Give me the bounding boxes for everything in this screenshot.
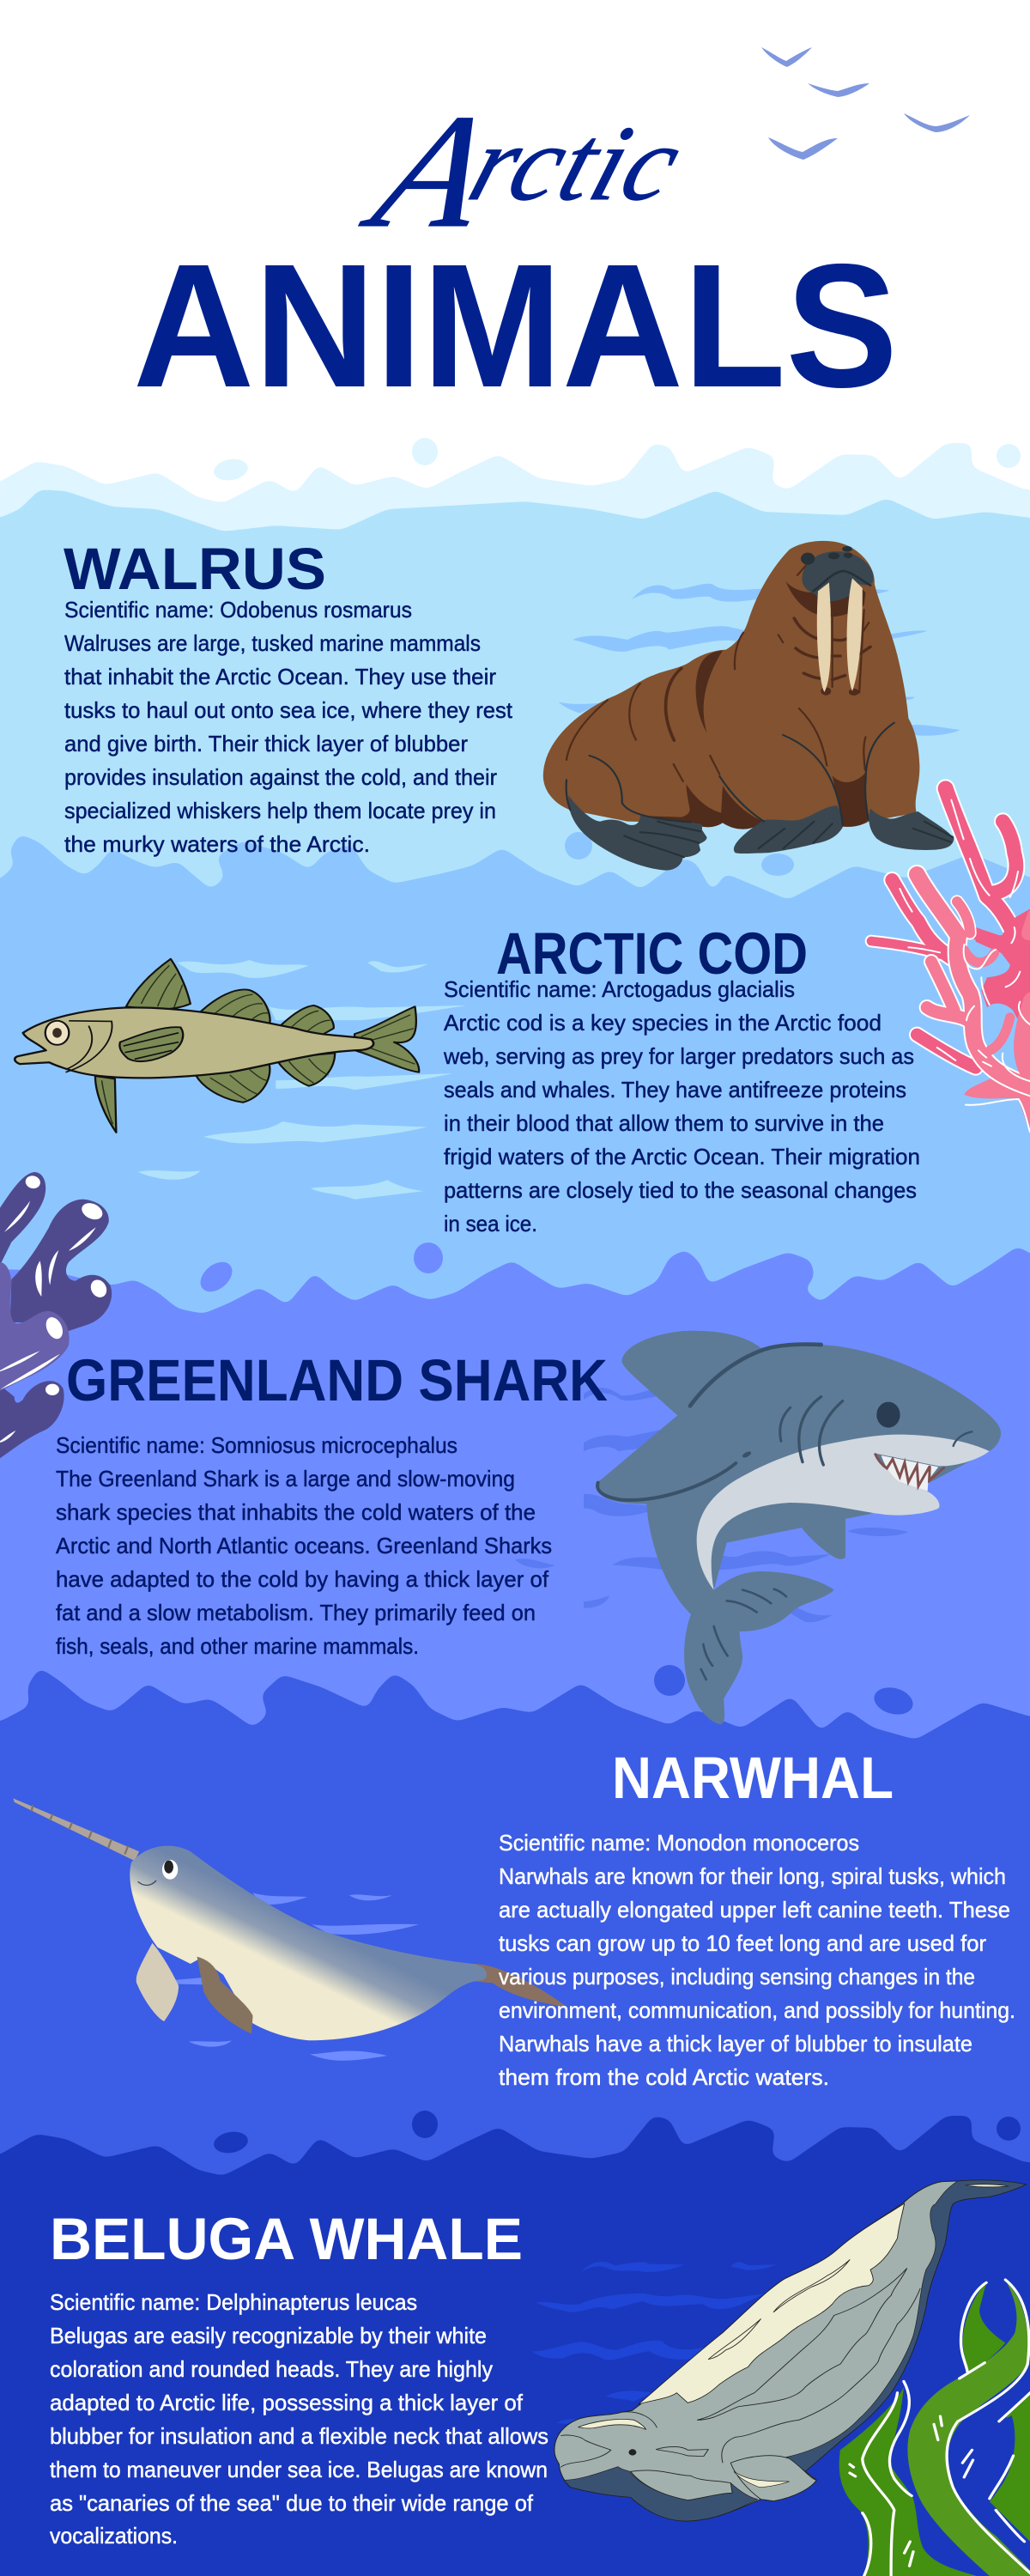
panel: beluga whale [50, 2180, 1030, 2576]
icon: seaweed [839, 2280, 1030, 2576]
text: walrus description: that inhabit the Arctic Ocean. They use their [64, 664, 496, 690]
text: walrus description: Scientific name: Odobenus rosmarus [64, 597, 412, 623]
text: greenland shark description: fat and a slow metabolism. They primarily feed on [56, 1600, 536, 1625]
text: greenland shark description: Scientific name: Somniosus microcephalus [56, 1432, 457, 1458]
illustration: walrus [543, 541, 960, 871]
text: beluga whale description: blubber for insulation and a flexible neck that allows [50, 2423, 548, 2449]
text: greenland shark description: have adapted to the cold by having a thick layer of [56, 1566, 549, 1592]
heading: arctic cod: ARCTIC COD [496, 920, 808, 987]
text: arctic cod description [443, 976, 920, 1236]
text: arctic cod description: seals and whales. They have antifreeze proteins [444, 1077, 906, 1103]
text: walrus description: specialized whiskers help them locate prey in [64, 798, 496, 823]
text: beluga whale description: Scientific name: Delphinapterus leucas [50, 2289, 417, 2315]
text: arctic cod description: web, serving as prey for larger predators such as [443, 1043, 914, 1069]
text: narwhal description: them from the cold Arctic waters. [499, 2064, 829, 2090]
panel: walrus [64, 536, 960, 871]
icon: pink coral [871, 788, 1030, 1133]
heading: beluga whale: BELUGA WHALE [50, 2206, 523, 2272]
text: narwhal description: various purposes, including sensing changes in the [499, 1964, 975, 1990]
text: narwhal description [499, 1830, 1015, 2090]
text: arctic cod description: in their blood that allow them to survive in the [444, 1110, 884, 1136]
heading: walrus: WALRUS [64, 536, 326, 602]
text: arctic cod description: in sea ice. [444, 1211, 537, 1236]
text: beluga whale description: vocalizations. [50, 2523, 178, 2549]
text: narwhal description: tusks can grow up to 10 feet long and are used for [499, 1930, 986, 1956]
text: narwhal description: environment, communication, and possibly for hunting. [499, 1997, 1015, 2023]
text: walrus description [64, 597, 513, 857]
text: greenland shark description: Arctic and North Atlantic oceans. Greenland Sharks [56, 1533, 552, 1558]
text: beluga whale description: Belugas are easily recognizable by their white [50, 2323, 487, 2348]
title [133, 81, 898, 424]
illustration: narwhal [13, 1798, 568, 2061]
panel: greenland shark [56, 1331, 1001, 1724]
text: arctic cod description: Arctic cod is a key species in the Arctic food [444, 1010, 882, 1036]
text: narwhal description: Narwhals have a thick layer of blubber to insulate [499, 2031, 972, 2057]
illustration: arctic cod fish [15, 959, 466, 1200]
panel: arctic cod [15, 920, 920, 1236]
illustration: beluga whale and seaweed [532, 2180, 1030, 2576]
title: Arctic script: A [347, 81, 515, 262]
text: arctic cod description: frigid waters of the Arctic Ocean. Their migration [444, 1144, 920, 1170]
text: greenland shark description: The Greenland Shark is a large and slow-moving [56, 1466, 515, 1492]
text: greenland shark description: shark species that inhabits the cold waters of the [56, 1499, 536, 1525]
text: walrus description: the murky waters of the Arctic. [64, 831, 370, 857]
text: walrus description: tusks to haul out onto sea ice, where they rest [64, 697, 513, 723]
icon: purple coral [0, 1172, 112, 1458]
text: beluga whale description: adapted to Arctic life, possessing a thick layer of [50, 2390, 524, 2415]
text: beluga whale description [50, 2289, 548, 2549]
text: narwhal description: are actually elongated upper left canine teeth. These [499, 1897, 1010, 1923]
text: walrus description: Walruses are large, tusked marine mammals [64, 630, 481, 656]
text: narwhal description: Narwhals are known for their long, spiral tusks, which [499, 1863, 1006, 1889]
text: narwhal description: Scientific name: Monodon monoceros [499, 1830, 859, 1856]
heading: greenland shark: GREENLAND SHARK [66, 1347, 608, 1413]
text: walrus description: and give birth. Their thick layer of blubber [64, 731, 468, 756]
text: beluga whale description: them to maneuver under sea ice. Belugas are known [50, 2457, 548, 2482]
title: Arctic script: rctic [457, 104, 697, 222]
illustration: greenland shark [515, 1331, 1001, 1724]
text: walrus description: provides insulation against the cold, and their [64, 764, 497, 790]
text: arctic cod description: Scientific name: Arctogadus glacialis [444, 976, 795, 1002]
heading: narwhal: NARWHAL [612, 1745, 894, 1811]
panel: narwhal [13, 1745, 1015, 2090]
title: ANIMALS: ANIMALS [133, 228, 898, 424]
text: beluga whale description: coloration and rounded heads. They are highly [50, 2356, 493, 2382]
icon: flock of birds [761, 47, 970, 160]
text: beluga whale description: as "canaries of the sea" due to their wide range of [50, 2490, 534, 2516]
text: greenland shark description: fish, seals, and other marine mammals. [56, 1633, 419, 1659]
text: greenland shark description [56, 1432, 552, 1659]
text: arctic cod description: patterns are closely tied to the seasonal changes [444, 1177, 917, 1203]
